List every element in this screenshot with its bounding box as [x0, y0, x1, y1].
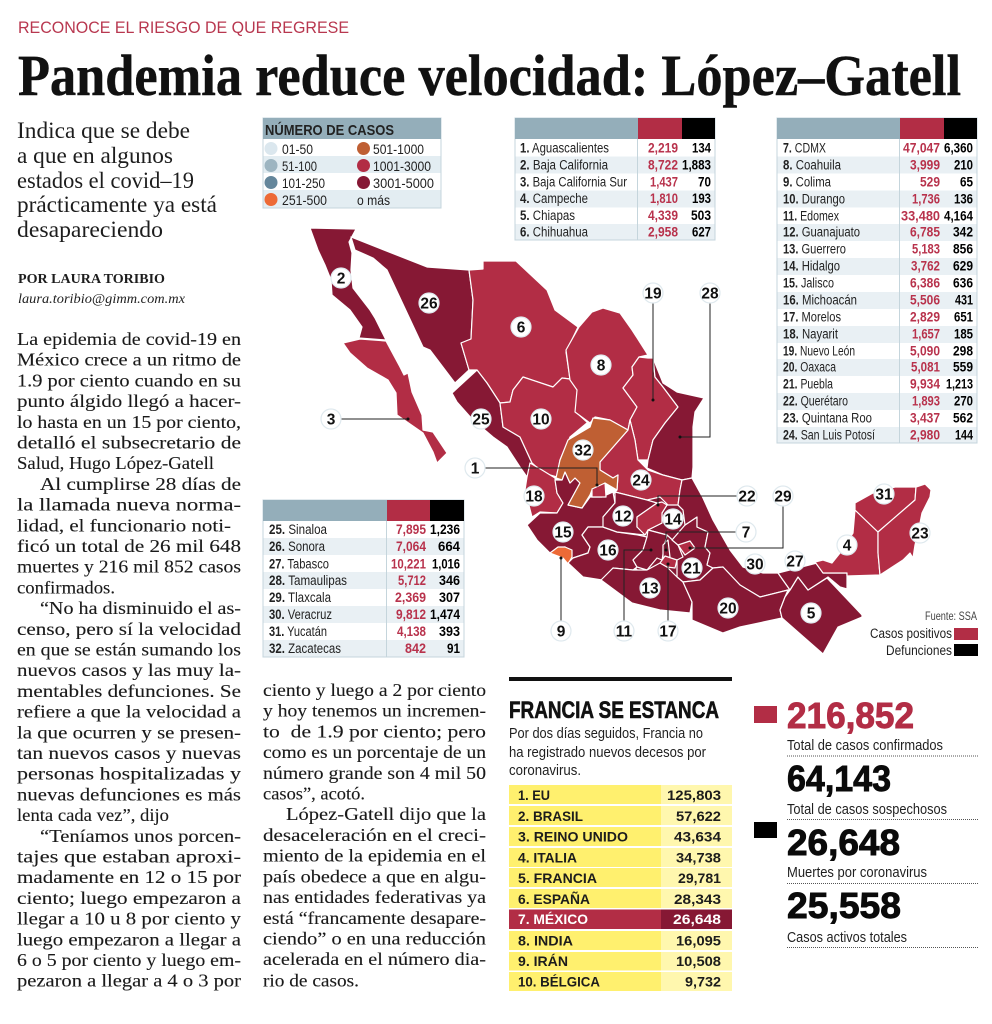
table: states 1 to 6: [515, 118, 715, 240]
map of Mexico: [310, 228, 931, 654]
stat: deaths: [787, 822, 979, 884]
table: states 7 to 24: 9. Colima: [783, 174, 831, 190]
table: states 7 to 24: 22. Querétaro: [783, 394, 848, 408]
byline: [18, 271, 186, 307]
article text column 1: tan nuevos casos y nuevas: [17, 743, 241, 763]
marker 32: 32: [574, 442, 592, 460]
table: states 7 to 24: 65: [960, 174, 973, 190]
article text column 2: desaceleración en el creci-: [263, 825, 486, 845]
article text column 1: La epidemia de covid-19 en: [17, 329, 241, 349]
table: states 1 to 6: 1,883: [682, 158, 711, 172]
article text column 1: censo, pero sí la velocidad: [17, 619, 241, 639]
table: states 7 to 24: [777, 118, 977, 443]
marker 15: 15: [554, 524, 572, 542]
deaths ranking table: 10. BÉLGICA: [518, 974, 600, 990]
table: states 7 to 24: 19. Nuevo León: [783, 344, 855, 358]
table: states 1 to 6: 8,722: [648, 158, 678, 172]
marker 23: 23: [911, 526, 929, 542]
article text column 2: miento de la epidemia en el: [263, 846, 486, 866]
subheading: estados el covid–19: [17, 168, 194, 193]
deaths ranking table: 3. REINO UNIDO: [518, 828, 628, 844]
table: states 7 to 24: 1,657: [912, 326, 940, 342]
table: states 25 to 32: 2,369: [395, 590, 426, 605]
marker 3: 3: [327, 412, 336, 428]
table: states 7 to 24: 5,506: [910, 292, 940, 308]
table: states 7 to 24: 210: [954, 158, 973, 172]
deaths ranking table: 7. MÉXICO: [518, 911, 588, 927]
state: Campeche: [815, 510, 880, 576]
leader lines: [341, 303, 783, 621]
article text column 1: detalló el subsecretario de: [17, 432, 241, 452]
state: Colima: [550, 547, 572, 564]
marker 24: 24: [632, 472, 650, 490]
state: Tamaulipas: [647, 358, 704, 480]
state: Baja California Sur: [343, 339, 447, 463]
map number markers and leader lines: [321, 268, 930, 641]
marker 16: 16: [599, 542, 617, 560]
marker 9: 9: [557, 624, 566, 640]
subheading: Indica que se debe: [17, 118, 190, 143]
article text column 2: acelerada en el número dia-: [263, 949, 486, 969]
state: Michoacan: [568, 527, 647, 580]
table: states 25 to 32: 664: [438, 539, 460, 554]
table: states 25 to 32: 7,064: [396, 539, 426, 554]
table: states 7 to 24: 47,047: [903, 140, 940, 156]
state: Durango: [500, 377, 593, 477]
article text column 2: país obedece a que en algu-: [263, 866, 486, 886]
table: states 25 to 32: 9,812: [396, 607, 426, 622]
stat: confirmed cases: [787, 695, 979, 756]
panel description: Por dos días seguidos, Francia no: [509, 726, 703, 742]
map legend: número de casos: 501-1000: [373, 142, 424, 157]
article text column 2: y hoy tenemos un incremen-: [263, 701, 486, 721]
marker 20: 20: [719, 600, 737, 618]
table: states 1 to 6: 3. Baja California Sur: [520, 174, 627, 190]
article text column 2: [263, 680, 486, 991]
table: states 7 to 24: 5,183: [912, 242, 940, 256]
table: states 7 to 24: 33,480: [901, 208, 940, 224]
table: states 7 to 24: 529: [920, 174, 940, 190]
table: states 7 to 24: 342: [953, 224, 973, 240]
marker 6: 6: [517, 320, 526, 336]
stat: confirmed cases: 216,852: [787, 695, 914, 736]
deaths ranking table: 8. INDIA: [518, 932, 573, 948]
article text column 2: casos”, acotó.: [263, 784, 365, 804]
marker 29: 29: [774, 488, 792, 506]
icon: black square: [754, 822, 777, 838]
table: states 25 to 32: 346: [439, 573, 460, 588]
article text column 1: la que ocurren y se presen-: [17, 722, 241, 742]
marker 5: [801, 603, 821, 623]
table: states 1 to 6: 6. Chihuahua: [520, 224, 588, 240]
marker 31: 31: [875, 486, 893, 504]
stat: deaths: 26,648: [787, 822, 900, 863]
state: Tlaxcala: [678, 541, 695, 555]
article text column 2: está “francamente desapare-: [263, 908, 486, 928]
table: states 25 to 32: 1,236: [430, 522, 460, 537]
marker 5: 5: [807, 606, 816, 622]
panel description: coronavirus.: [509, 763, 581, 779]
table: states 7 to 24: 24. San Luis Potosí: [783, 428, 875, 442]
panel: Francia se estanca: [509, 677, 732, 991]
source and series legend: Fuente: SSA: [925, 609, 977, 623]
article text column 1: 1.9 por ciento cuando en su: [17, 370, 241, 390]
table: states 25 to 32: 1,016: [432, 556, 460, 572]
state: Oaxaca: [683, 567, 788, 633]
subheading: desapareciendo: [17, 217, 163, 242]
article text column 1: lenta cada vez”, dijo: [17, 805, 169, 825]
map legend: número de casos: NÚMERO DE CASOS: [265, 121, 394, 139]
table: states 7 to 24: 4,164: [944, 208, 973, 224]
marker 3: [321, 409, 341, 429]
stat: confirmed cases: Total de casos confirmados: [787, 737, 943, 754]
deaths ranking table: 34,738: [676, 850, 721, 866]
marker 18: 18: [525, 488, 543, 506]
article text column 2: ciendo” o en una reducción: [263, 928, 486, 948]
table: states 25 to 32: 7,895: [396, 522, 426, 537]
article text column 1: lidad, el funcionario noti-: [17, 515, 231, 535]
article text column 1: ficó un total de 26 mil 648: [17, 536, 241, 556]
article text column 1: en que se están sumando los: [17, 640, 241, 660]
article text column 2: to de 1.9 por ciento; pero: [263, 721, 486, 741]
table: states 7 to 24: 11. Edomex: [783, 208, 839, 224]
state: Puebla: [672, 517, 713, 582]
deaths ranking table: 16,095: [676, 932, 721, 948]
table: states 7 to 24: 8. Coahuila: [783, 158, 841, 172]
table: states 1 to 6: 1. Aguascalientes: [520, 140, 609, 156]
table: states 7 to 24: 5,081: [911, 360, 940, 374]
table: states 7 to 24: 2,980: [910, 428, 940, 442]
table: states 25 to 32: 25. Sinaloa: [269, 522, 327, 537]
article text column 2: López-Gatell dijo que la: [286, 804, 486, 824]
article text column 1: refiere a que la velocidad a: [17, 702, 241, 722]
deaths ranking table: 125,803: [667, 787, 721, 803]
article text column 1: confirmados.: [17, 577, 115, 597]
marker 30: 30: [746, 556, 764, 574]
table: states 7 to 24: 270: [954, 394, 973, 408]
panel description: ha registrado nuevos decesos por: [509, 745, 706, 761]
marker 4: 4: [843, 538, 852, 554]
panel description: [509, 726, 706, 779]
byline: laura.toribio@gimm.com.mx: [18, 292, 186, 307]
table: states 7 to 24: 16. Michoacán: [783, 292, 857, 308]
table: states 1 to 6: 4,339: [648, 208, 678, 223]
map legend: número de casos: 51-100: [282, 159, 317, 174]
state: Nayarit: [525, 463, 563, 517]
deaths ranking table: [509, 785, 732, 991]
state: San Luis Potosi: [600, 420, 682, 507]
marker 7: 7: [742, 524, 750, 542]
article text column 2: ciento y luego a 2 por ciento: [263, 680, 486, 700]
table: states 7 to 24: 559: [953, 360, 973, 374]
table: states 7 to 24: 14. Hidalgo: [783, 258, 840, 274]
article text column 2: como es un porcentaje de un: [263, 742, 486, 762]
state: Hidalgo: [648, 505, 702, 545]
source and series legend: Defunciones: [886, 643, 952, 658]
marker 14: 14: [664, 512, 682, 528]
table: states 7 to 24: 2,829: [910, 310, 940, 324]
marker 27: 27: [786, 554, 804, 570]
table: states 7 to 24: 3,437: [910, 410, 940, 426]
table: states 1 to 6: 2,219: [648, 140, 678, 156]
table: states 7 to 24: 3,762: [911, 258, 940, 274]
marker 2: 2: [337, 270, 345, 288]
state: Coahuila: [566, 308, 648, 430]
deaths ranking table: 57,622: [676, 808, 721, 824]
state: Guerrero: [601, 563, 692, 613]
marker 21: 21: [683, 560, 701, 578]
table: states 25 to 32: 29. Tlaxcala: [269, 590, 331, 605]
map legend: número de casos: 101-250: [282, 176, 325, 191]
map legend: número de casos: 1001-3000: [373, 159, 431, 174]
article text column 1: personas hospitalizadas y: [17, 764, 241, 784]
subheading: [17, 118, 217, 242]
article text column 1: muertes y 216 mil 852 casos: [17, 557, 241, 577]
table: states 7 to 24: 136: [954, 192, 973, 206]
marker 8: 8: [597, 358, 606, 374]
table: states 7 to 24: 144: [955, 428, 973, 442]
marker 25: 25: [472, 412, 490, 428]
table: states 7 to 24: 629: [953, 258, 973, 274]
table: states 25 to 32: 4,138: [397, 624, 426, 639]
deaths ranking table: 6. ESPAÑA: [518, 890, 590, 907]
article text column 2: nas entidades federativas ya: [263, 887, 486, 907]
marker 6: [511, 317, 531, 337]
table: states 7 to 24: 431: [955, 292, 973, 308]
marker 11: 11: [616, 624, 633, 640]
stat: suspected cases: [787, 758, 979, 820]
deaths ranking table: 9,732: [685, 974, 721, 990]
table: states 25 to 32: 91: [447, 641, 460, 656]
state: Yucatan: [855, 487, 916, 532]
table: states 7 to 24: 21. Puebla: [783, 376, 833, 392]
table: states 7 to 24: 185: [954, 326, 973, 342]
state: Jalisco: [527, 472, 615, 563]
article text column 1: nuevos casos y las muy la-: [17, 660, 241, 680]
marker 17: 17: [659, 624, 677, 640]
table: states 7 to 24: 636: [953, 276, 973, 290]
table: states 7 to 24: 17. Morelos: [783, 310, 841, 324]
table: states 25 to 32: 28. Tamaulipas: [269, 573, 347, 588]
marker 11: [614, 621, 634, 641]
state: Chiapas: [780, 577, 862, 654]
deaths ranking table: 28,343: [674, 891, 721, 907]
marker 2: [331, 268, 351, 288]
article text column 1: ciento; luego empezaron a: [17, 888, 241, 908]
subheading: a que en algunos: [17, 143, 173, 168]
source and series legend: Casos positivos: [870, 626, 952, 641]
table: states 25 to 32: 30. Veracruz: [269, 607, 332, 622]
table: states 1 to 6: 1,810: [650, 191, 678, 206]
table: states 7 to 24: 18. Nayarit: [783, 326, 838, 342]
table: states 7 to 24: 5,090: [910, 344, 940, 358]
state: Morelos: [660, 556, 677, 568]
table: states 7 to 24: 10. Durango: [783, 192, 845, 206]
kicker: RECONOCE EL RIESGO DE QUE REGRESE: [18, 19, 349, 37]
table: states 7 to 24: 856: [953, 242, 973, 256]
table: states 7 to 24: 15. Jalisco: [783, 276, 834, 290]
table: states 7 to 24: 1,213: [946, 376, 973, 392]
map legend: número de casos: 251-500: [282, 193, 327, 208]
table: states 7 to 24: 3,999: [910, 158, 940, 172]
marker 28: 28: [701, 286, 719, 302]
map legend: número de casos: 01-50: [282, 142, 313, 157]
article text column 1: Salud, Hugo López-Gatell: [17, 453, 214, 473]
table: states 25 to 32: 27. Tabasco: [269, 556, 329, 572]
marker 22: 22: [738, 488, 756, 506]
state: Ciudad de Mexico: [663, 540, 670, 558]
state: Veracruz: [678, 478, 790, 597]
marker 4: [837, 535, 857, 555]
deaths ranking table: 1. EU: [518, 787, 550, 803]
table: states 1 to 6: 503: [691, 208, 711, 223]
source and series legend: [870, 609, 978, 658]
byline: POR LAURA TORIBIO: [18, 271, 165, 286]
article text column 1: madamente en 12 o 15 por: [17, 867, 241, 887]
table: states 7 to 24: 1,893: [912, 394, 940, 408]
deaths ranking table: 43,634: [674, 828, 721, 844]
article text column 1: llegar a 10 u 8 por ciento y: [17, 909, 241, 929]
table: states 25 to 32: 307: [439, 590, 460, 605]
article text column 1: mentables defunciones. Se: [17, 681, 241, 701]
state: Chihuahua: [461, 261, 578, 403]
table: states 7 to 24: 6,360: [944, 140, 973, 156]
table: states 1 to 6: 70: [698, 174, 711, 190]
state: Aguascalientes: [592, 483, 606, 497]
table: states 25 to 32: 31. Yucatán: [269, 624, 327, 639]
central fill under the small states: [600, 480, 713, 590]
deaths ranking table: 26,648: [673, 911, 721, 927]
state: Guanajuato: [603, 492, 657, 535]
marker 26: 26: [420, 296, 438, 312]
subheading: prácticamente ya está: [17, 192, 217, 217]
article text column 1: “Teníamos unos porcen-: [40, 826, 241, 846]
deaths ranking table: 2. BRASIL: [518, 808, 583, 824]
article text column 1: punto álgido llegó a hacer-: [17, 391, 241, 411]
table: states 1 to 6: 4. Campeche: [520, 191, 588, 206]
table: states 1 to 6: 2. Baja California: [520, 158, 608, 172]
table: states 7 to 24: 651: [954, 310, 973, 324]
marker 12: 12: [614, 508, 632, 526]
article text column 1: nuevas defunciones es más: [17, 784, 241, 804]
article text column 1: [17, 329, 241, 991]
table: states 1 to 6: 627: [692, 224, 711, 240]
table: states 25 to 32: 26. Sonora: [269, 539, 325, 554]
article text column 1: “No ha disminuido el as-: [40, 598, 241, 618]
deaths ranking table: 5. FRANCIA: [518, 870, 597, 886]
state: Sonora: [351, 237, 473, 383]
article text column 1: la llamada nueva norma-: [17, 495, 241, 515]
table: states 7 to 24: 562: [953, 410, 973, 426]
table: states 1 to 6: 1,437: [650, 174, 678, 190]
table: states 7 to 24: 20. Oaxaca: [783, 360, 836, 374]
table: states 7 to 24: 1,736: [912, 192, 940, 206]
article text column 1: luego empezaron a llegar a: [17, 929, 241, 949]
table: states 1 to 6: 134: [692, 140, 711, 156]
stat: suspected cases: Total de casos sospechosos: [787, 801, 947, 818]
stat: active cases: 25,558: [787, 885, 901, 926]
deaths ranking table: 4. ITALIA: [518, 850, 577, 866]
stat: deaths: Muertes por coronavirus: [787, 864, 927, 881]
table: states 25 to 32: [263, 500, 464, 657]
deaths ranking table: 10,508: [676, 953, 721, 969]
table: states 25 to 32: 842: [405, 641, 426, 656]
table: states 7 to 24: 298: [953, 344, 973, 358]
state: Sinaloa: [452, 370, 532, 477]
marker 8: [591, 355, 611, 375]
table: states 1 to 6: 5. Chiapas: [520, 208, 575, 223]
table: states 7 to 24: 13. Guerrero: [783, 242, 846, 256]
table: states 25 to 32: 393: [439, 624, 460, 639]
stat: active cases: Casos activos totales: [787, 929, 907, 946]
article text column 1: México crece a un ritmo de: [17, 350, 241, 370]
state: Nuevo Leon: [623, 357, 678, 460]
stat: active cases: [787, 885, 979, 948]
state: Baja California: [310, 228, 386, 340]
table: states 7 to 24: 9,934: [910, 376, 940, 392]
table: states 1 to 6: 2,958: [648, 224, 678, 240]
map legend: número de casos: [263, 118, 441, 208]
table: states 25 to 32: 10,221: [391, 556, 426, 572]
icon: red square: [754, 706, 777, 723]
article text column 1: 6 o 5 por ciento y luego em-: [17, 950, 241, 970]
map legend: número de casos: o más: [357, 193, 390, 208]
state: Queretaro: [637, 502, 667, 535]
table: states 7 to 24: 23. Quintana Roo: [783, 410, 872, 426]
marker 7: [736, 522, 756, 542]
table: states 7 to 24: 12. Guanajuato: [783, 224, 860, 240]
marker 19: 19: [644, 286, 662, 302]
table: states 25 to 32: 1,474: [430, 607, 460, 622]
marker 13: 13: [641, 580, 659, 598]
panel: national totals: [754, 695, 979, 948]
table: states 7 to 24: 6,785: [910, 224, 940, 240]
article text column 1: tajes que estaban aproxi-: [17, 846, 241, 866]
article text column 1: Al cumplirse 28 días de: [40, 474, 241, 494]
state: Quintana Roo: [878, 484, 931, 575]
table: states 7 to 24: 7. CDMX: [783, 140, 826, 156]
marker 1: 1: [471, 460, 480, 478]
article text column 1: lo hasta en un 15 por ciento,: [17, 412, 241, 432]
stat: suspected cases: 64,143: [787, 758, 891, 799]
state: Edomex: [633, 530, 667, 570]
article text column 2: número grande son 4 mil 50: [263, 763, 486, 783]
panel heading: FRANCIA SE ESTANCA: [509, 697, 719, 724]
marker 10: 10: [532, 412, 550, 428]
marker 1: [465, 458, 485, 478]
table: states 7 to 24: 6,386: [910, 276, 940, 290]
table: states 25 to 32: 32. Zacatecas: [269, 641, 341, 656]
map legend: número de casos: 3001-5000: [373, 176, 434, 191]
article text column 2: rio de casos.: [263, 971, 359, 991]
state: Zacatecas: [556, 418, 628, 508]
table: states 25 to 32: 5,712: [398, 573, 426, 588]
state: Tabasco: [778, 563, 847, 590]
deaths ranking table: 29,781: [678, 870, 721, 886]
marker 9: [551, 621, 571, 641]
table: states 1 to 6: 193: [692, 191, 711, 206]
article text column 1: pezaron a llegar a 4 o 3 por: [17, 971, 241, 991]
deaths ranking table: 9. IRÁN: [518, 953, 568, 969]
